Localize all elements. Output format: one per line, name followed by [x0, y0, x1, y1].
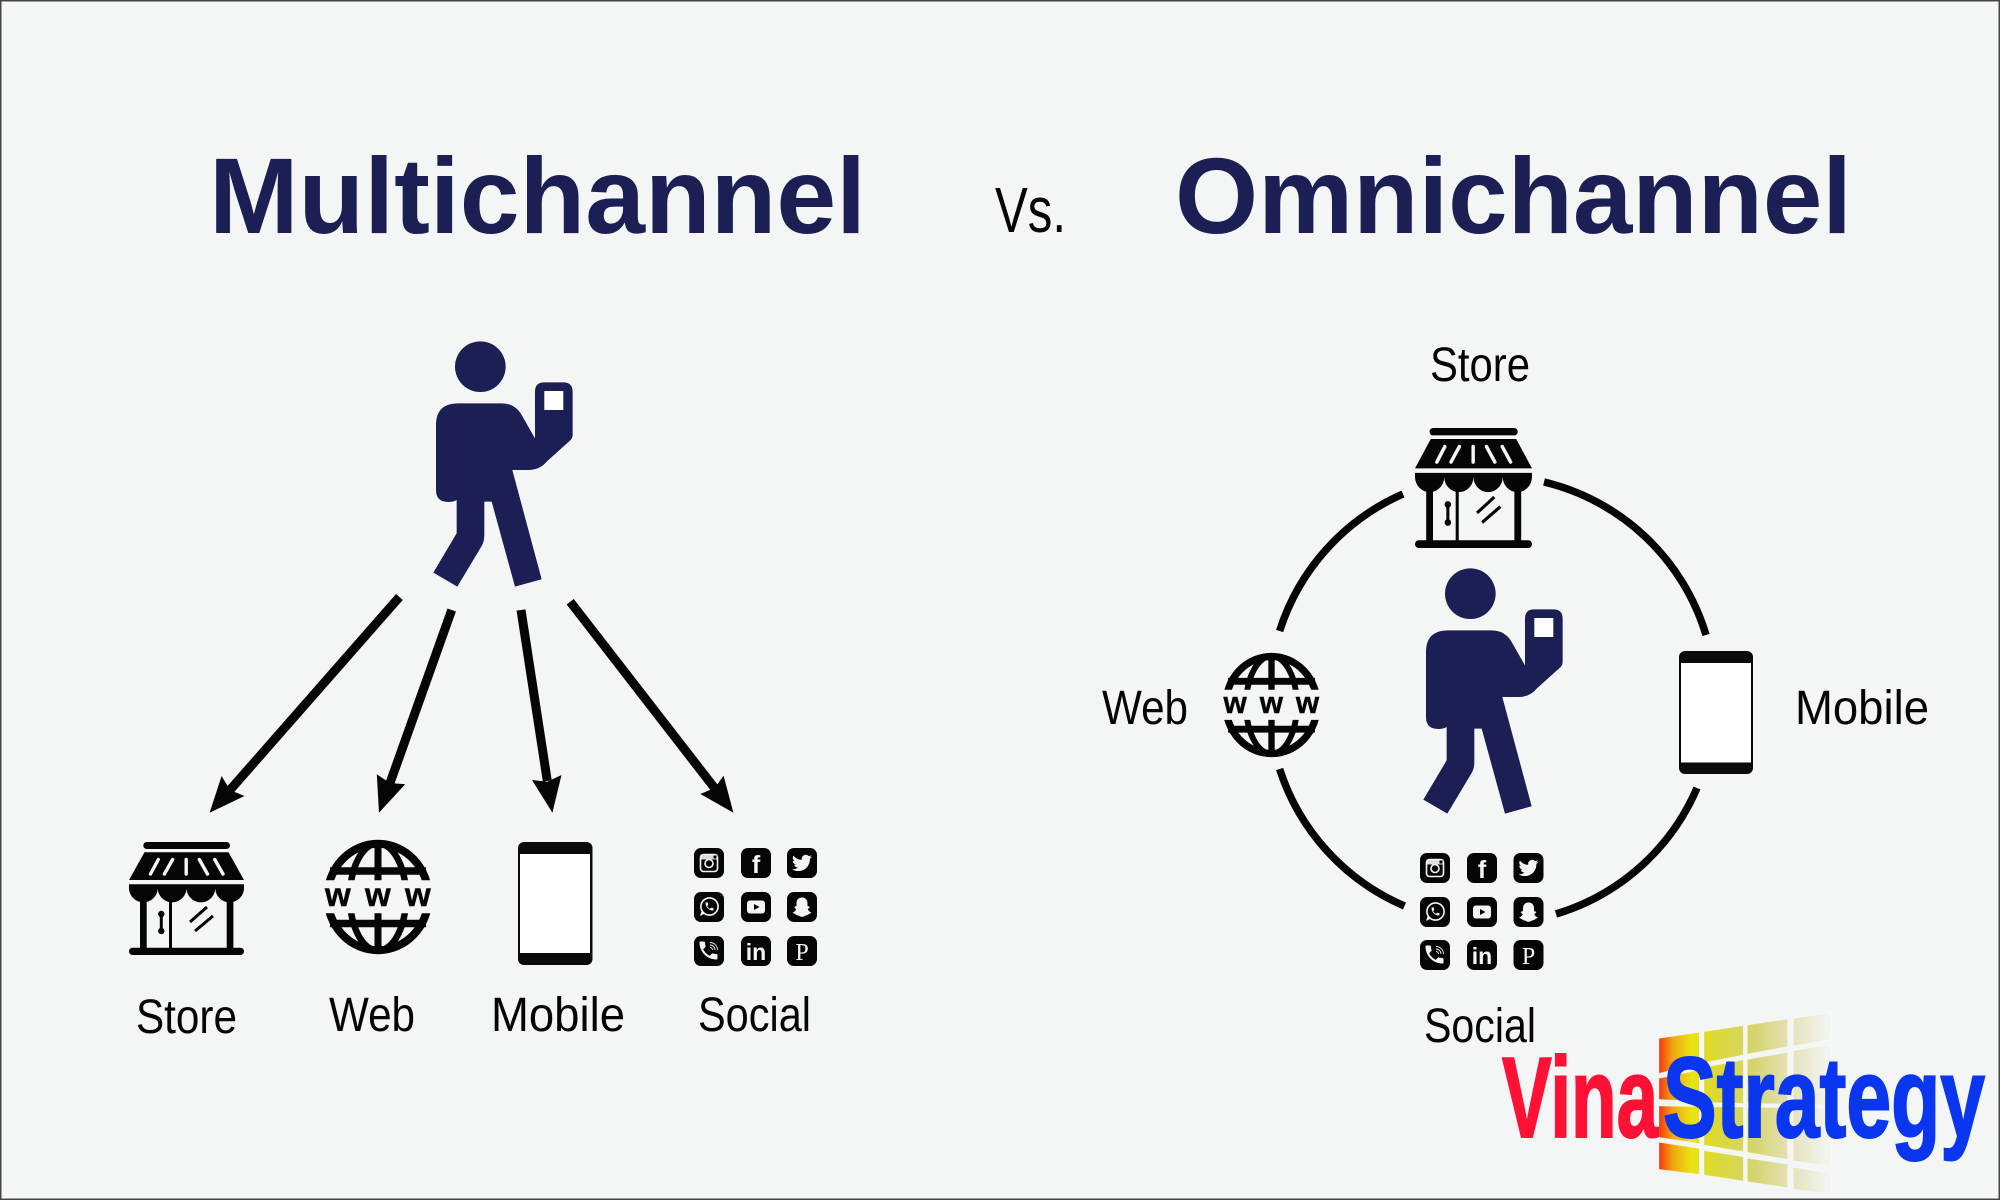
icon: mobile phone	[518, 842, 592, 965]
icon: person with phone (omnichannel)	[1423, 568, 1563, 814]
icon: globe www: www	[324, 876, 431, 913]
icons: social media grid	[694, 848, 817, 966]
arrow to web	[377, 610, 452, 813]
icon: store	[1415, 428, 1532, 548]
arrow to mobile	[521, 610, 562, 813]
icons: social media grid: in	[746, 939, 766, 965]
arrow to social	[570, 602, 733, 813]
icon: store	[129, 842, 244, 955]
label: Social: Social	[1424, 1000, 1536, 1053]
label: Mobile: Mobile	[1795, 682, 1929, 735]
icon: person with phone (multichannel)	[433, 341, 573, 587]
arrow to store	[210, 597, 399, 813]
label: Social: Social	[698, 989, 811, 1042]
label: Web: Web	[1102, 682, 1188, 735]
icons: social media grid: P	[795, 940, 809, 966]
label: Web: Web	[329, 989, 415, 1042]
icon: globe www: www	[1223, 687, 1320, 720]
icons: social media grid: P	[1522, 944, 1535, 970]
icon: mobile phone	[1679, 651, 1753, 774]
icons: social media grid: f	[752, 851, 761, 879]
icon: globe www	[324, 840, 431, 954]
title: Omnichannel: Omnichannel	[1175, 135, 1852, 256]
logo: VinaStrategy	[1502, 1013, 1985, 1194]
panel: multichannel diagram	[129, 341, 817, 1044]
ring: arcs connecting channels	[1280, 482, 1706, 914]
text: Vs.: Vs.	[995, 174, 1066, 246]
label: Store: Store	[136, 991, 237, 1044]
title: Multichannel: Multichannel	[209, 135, 866, 256]
logo text: Vina: Vina	[1502, 1035, 1659, 1162]
icon: globe www	[1223, 653, 1320, 757]
panel: omnichannel diagram	[1102, 339, 1929, 1053]
logo window panes	[1659, 1013, 1832, 1194]
label: Store: Store	[1430, 339, 1530, 392]
icons: social media grid: in	[1472, 943, 1492, 969]
icons: social media grid: f	[1478, 856, 1487, 884]
icons: social media grid	[1420, 853, 1544, 970]
label: Mobile: Mobile	[491, 989, 625, 1042]
